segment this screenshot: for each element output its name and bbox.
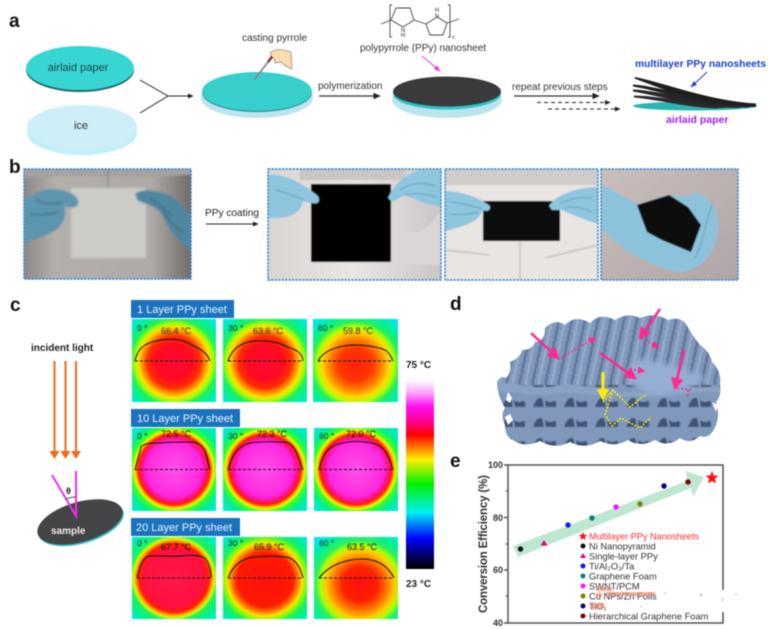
casting pyrrole label: casting pyrrole — [242, 33, 307, 44]
10 layer label: 10 Layer PPy sheet — [137, 413, 233, 425]
1 layer label — [131, 300, 234, 318]
sample disc: sample — [51, 526, 86, 537]
polymerization label and arrow: polymerization — [318, 81, 382, 92]
photo: crumpled black sheet — [597, 165, 742, 284]
map 20 layer 60 deg: 60 ° — [319, 538, 334, 548]
1 layer label: 1 Layer PPy sheet — [137, 304, 227, 316]
chemical structure of polypyrrole — [381, 5, 459, 41]
pink light arrows — [531, 309, 692, 397]
airlaid paper disc — [26, 46, 134, 92]
map 1 layer 0 deg: 66.4 °C — [161, 326, 192, 336]
legend: Single-layer PPy — [589, 552, 658, 562]
map 20 layer 0 deg: 67.7 °C — [161, 542, 192, 552]
blue pointer arrow — [691, 72, 707, 87]
panel a: fabrication schematic — [9, 5, 766, 155]
photo: black sheet small — [441, 165, 602, 284]
20 layer label: 20 Layer PPy sheet — [136, 522, 232, 534]
chemical structure of polypyrrole: N — [435, 14, 439, 20]
map 20 layer 0 deg: 0 ° — [137, 538, 148, 548]
sample disc — [32, 491, 129, 555]
incident light label: incident light — [31, 343, 94, 354]
ice disc: ice — [74, 120, 88, 132]
incidence angle: θ — [66, 486, 71, 496]
map 10 layer 60 deg: 60 ° — [319, 431, 334, 441]
repeat previous steps label and arrows: repeat previous steps — [512, 82, 608, 93]
y axis tick labels: 80 — [493, 513, 503, 523]
map 20 layer 30 deg: 30 ° — [228, 538, 243, 548]
legend: TiO₂ — [589, 602, 608, 612]
chemical structure of polypyrrole: n — [452, 35, 455, 41]
heading b: b — [9, 157, 21, 178]
legend: SWNT/PCM — [589, 582, 640, 592]
map 10 layer 0 deg — [132, 428, 216, 511]
airlaid paper disc: airlaid paper — [48, 62, 109, 74]
map 10 layer 30 deg — [223, 428, 307, 511]
map 20 layer 30 deg — [223, 537, 307, 619]
chemical structure of polypyrrole: H — [435, 8, 439, 14]
y axis tick labels: 40 — [493, 618, 503, 628]
10 layer label — [131, 409, 240, 427]
map 20 layer 0 deg — [132, 537, 216, 619]
legend: Hierarchical Graphene Foam — [589, 612, 709, 622]
map 20 layer 30 deg: 65.9 °C — [254, 542, 285, 552]
map 20 layer 60 deg: 63.5 °C — [347, 542, 378, 552]
legend: Graphene Foam — [589, 572, 657, 582]
map 1 layer 60 deg — [313, 319, 398, 402]
panel b: photographs — [9, 157, 742, 284]
airlaid paper label: airlaid paper — [666, 114, 728, 126]
gaps in stack — [505, 392, 718, 425]
axes and ticks — [504, 465, 723, 623]
PPy coating label and arrow: PPy coating — [205, 208, 259, 219]
chemical structure of polypyrrole: N — [401, 28, 405, 34]
panel e: conversion efficiency chart — [450, 451, 747, 628]
icon: hand with dropper — [254, 50, 292, 80]
map 1 layer 60 deg: 60 ° — [318, 323, 333, 333]
panel c: thermal maps — [10, 295, 434, 619]
map 10 layer 30 deg: 30 ° — [228, 431, 243, 441]
PPy coating label and arrow — [205, 208, 259, 224]
y axis tick labels — [488, 460, 503, 628]
map 10 layer 60 deg — [314, 428, 398, 511]
heading a: a — [9, 11, 20, 32]
heading e: e — [450, 451, 461, 472]
photo: white paper held — [20, 165, 195, 283]
y axis tick labels: 60 — [493, 565, 503, 575]
multilayer sheets drawing — [633, 77, 757, 110]
magenta pointer arrow — [422, 56, 440, 71]
map 1 layer 0 deg — [132, 319, 216, 402]
PPy coated disc — [392, 76, 502, 118]
map 20 layer 60 deg — [314, 537, 398, 619]
legend: Ni Nanopyramid — [589, 542, 656, 552]
map 10 layer 0 deg: 0 ° — [137, 431, 148, 441]
map 10 layer 30 deg: 72.3 °C — [257, 429, 288, 439]
paper on ice disc — [201, 72, 313, 118]
nanosheet label: polypyrrole (PPy) nanosheet — [360, 43, 486, 54]
erased smudge over legend — [590, 587, 747, 612]
map 1 layer 30 deg: 30 ° — [228, 323, 243, 333]
data points — [518, 471, 718, 552]
legend: Ti/Al₂O₃/Ta — [589, 562, 635, 572]
green trend arrow — [513, 471, 704, 557]
map 1 layer 60 deg: 59.8 °C — [343, 326, 374, 336]
incident light arrows — [54, 361, 76, 457]
multilayer label: multilayer PPy nanosheets — [635, 59, 766, 70]
corrugated nanosheet stack — [496, 314, 722, 446]
map 1 layer 30 deg — [223, 319, 307, 402]
legend: Multilayer PPy Nanosheets — [589, 532, 699, 542]
legend: Cu NPs/Zn Foils — [589, 592, 657, 602]
map 10 layer 0 deg: 72.5 °C — [161, 429, 192, 439]
y axis title: Conversion Efficiency (%) — [478, 475, 490, 613]
yellow light arrows — [603, 372, 651, 428]
heading d: d — [450, 294, 462, 315]
heading c: c — [10, 295, 21, 316]
photo: black sheet large — [264, 165, 445, 284]
panel d: multilayer light trapping — [450, 294, 725, 455]
repeat previous steps label and arrows — [512, 82, 620, 109]
chemical structure of polypyrrole: H — [401, 33, 405, 39]
ice disc — [27, 105, 137, 155]
colour scale: 23 °C — [406, 579, 431, 590]
map 1 layer 0 deg: 0 ° — [137, 323, 148, 333]
20 layer label — [131, 518, 240, 536]
map 1 layer 30 deg: 63.6 °C — [253, 326, 284, 336]
colour scale: 75 °C — [406, 360, 431, 371]
incidence angle — [52, 471, 76, 516]
colour scale — [406, 360, 434, 590]
map 10 layer 60 deg: 72.0 °C — [346, 429, 377, 439]
combining arrow — [140, 80, 193, 113]
y axis tick labels: 100 — [488, 460, 503, 470]
legend — [579, 532, 709, 622]
